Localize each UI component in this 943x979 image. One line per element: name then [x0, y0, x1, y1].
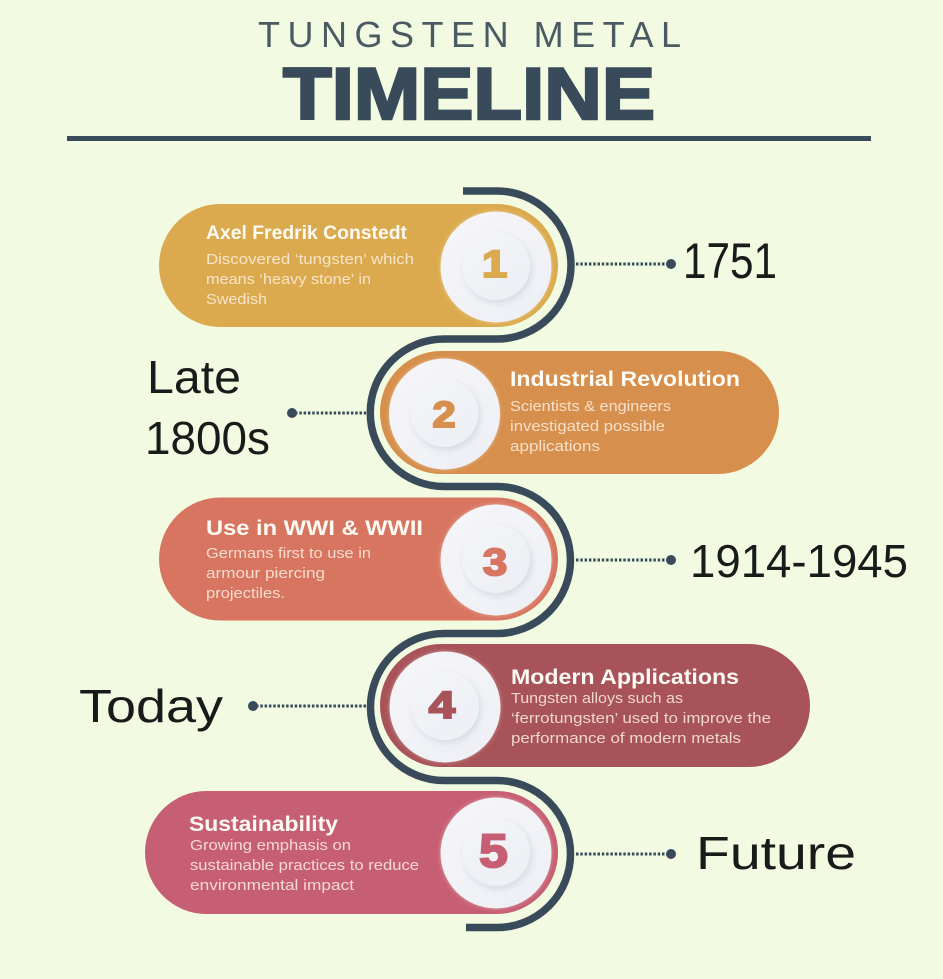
icon: number plate 3: 3	[483, 541, 507, 583]
step 3 heading: Use in WWI & WWII	[206, 517, 423, 540]
connector: step 5 to Future	[576, 849, 676, 859]
panel: step 2 pill	[380, 351, 779, 474]
date: 1914-1945: 1914-1945	[690, 535, 908, 587]
date: Late 1800s: 1800s	[145, 412, 270, 464]
step 2 description	[510, 398, 671, 455]
step 2 heading: Industrial Revolution	[510, 368, 740, 391]
icon: number plate 4: 4	[429, 684, 455, 727]
step 1 description	[206, 251, 414, 308]
step 4 heading: Modern Applications	[511, 666, 739, 689]
subtitle: Tungsten Metal: TUNGSTEN METAL	[258, 14, 681, 55]
step 4 description: Tungsten alloys such as	[511, 690, 683, 707]
connector: step 1 to 1751	[576, 259, 676, 269]
step 3 description: Germans first to use in	[206, 545, 371, 562]
step 5 description: environmental impact	[190, 877, 355, 894]
icon: number plate 2: 2	[432, 395, 456, 435]
step 2 description: Scientists & engineers	[510, 398, 671, 415]
icon: number plate 2	[389, 358, 500, 470]
date: Late 1800s: Late	[147, 351, 241, 403]
panel: step 1 pill	[159, 204, 558, 327]
connector: step 2 to Late 1800s	[287, 408, 366, 418]
date: Late 1800s	[145, 351, 270, 464]
step 1 description: means ‘heavy stone’ in	[206, 271, 371, 288]
title	[258, 14, 681, 135]
panel: step 3 pill	[159, 498, 558, 620]
step 5 description	[190, 837, 419, 894]
heading: Timeline: TIMELINE	[283, 54, 655, 135]
step 2 description: applications	[510, 438, 600, 455]
step 3 description: projectiles.	[206, 585, 285, 602]
serpentine timeline path	[370, 191, 571, 928]
date: Future: Future	[696, 827, 856, 879]
step 1 description: Swedish	[206, 291, 267, 308]
date: Today: Today	[79, 680, 223, 732]
step 5 description: sustainable practices to reduce	[190, 857, 419, 874]
step 1 description: Discovered ‘tungsten’ which	[206, 251, 414, 268]
step 2 description: investigated possible	[510, 418, 665, 435]
icon: number plate 5: 5	[479, 825, 508, 877]
date: 1751: 1751	[683, 233, 777, 289]
step 5 heading: Sustainability	[189, 813, 338, 836]
step 4 description: ‘ferrotungsten’ used to improve the	[511, 710, 771, 727]
panel: step 5 pill	[145, 791, 558, 914]
icon: number plate 5	[440, 798, 552, 908]
icon: number plate 4	[390, 652, 500, 762]
step 4 description: performance of modern metals	[511, 730, 741, 747]
step 3 description: armour piercing	[206, 565, 325, 582]
step 1 heading: Axel Fredrik Constedt	[206, 223, 408, 244]
step 3 description	[206, 545, 371, 602]
connector: step 3 to 1914-1945	[576, 555, 676, 565]
icon: number plate 1: 1	[482, 243, 507, 285]
panel: step 4 pill	[380, 644, 810, 767]
icon: number plate 3	[440, 504, 552, 616]
step 4 description	[511, 690, 771, 747]
step 5 description: Growing emphasis on	[190, 837, 351, 854]
connector: step 4 to Today	[248, 701, 366, 711]
icon: number plate 1	[440, 212, 552, 322]
